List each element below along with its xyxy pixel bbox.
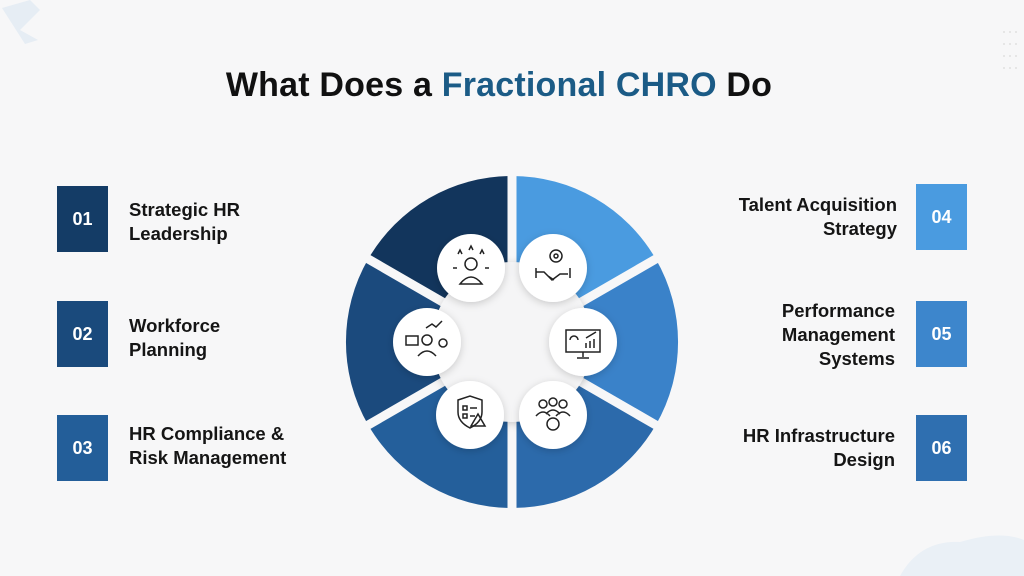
item 01 [57, 186, 240, 252]
label 04: Talent Acquisition [739, 194, 897, 215]
decoration: bottom-right blob [900, 536, 1024, 576]
decoration: dot grid [1003, 31, 1017, 69]
icon: person with briefcase and gear [393, 308, 461, 376]
number box 05: 05 [931, 324, 952, 344]
label 01: Strategic HR [129, 199, 240, 220]
label 02: Workforce [129, 315, 220, 336]
icon: team with gear [519, 381, 587, 449]
number box 06 [916, 415, 967, 481]
icon: dashboard monitor [549, 308, 617, 376]
label 03 [129, 423, 286, 468]
number box 03: 03 [72, 438, 93, 458]
number box 05 [916, 301, 967, 367]
label 02 [129, 315, 220, 360]
label 05: Performance [782, 300, 895, 321]
label 05: Management [782, 324, 895, 345]
title: What Does a Fractional CHRO Do [226, 66, 772, 104]
number box 03 [57, 415, 108, 481]
item 06 [743, 415, 967, 481]
icon: leader with stars [437, 234, 505, 302]
label 03: Risk Management [129, 447, 286, 468]
label 01 [129, 199, 240, 244]
label 06: Design [833, 449, 895, 470]
icon: handshake with target [519, 234, 587, 302]
label 03: HR Compliance & [129, 423, 284, 444]
label 04: Strategy [823, 218, 897, 239]
number box 02 [57, 301, 108, 367]
number box 04 [916, 184, 967, 250]
item 02 [57, 301, 220, 367]
number box 06: 06 [931, 438, 952, 458]
item 03 [57, 415, 286, 481]
decoration: top-left brush [2, 0, 40, 44]
label 04 [738, 194, 897, 239]
label 05: Systems [819, 348, 895, 369]
label 05 [782, 300, 895, 369]
label 01: Leadership [129, 223, 228, 244]
item 04 [738, 184, 967, 250]
icon: shield checklist warning [436, 381, 504, 449]
number box 01 [57, 186, 108, 252]
label 02: Planning [129, 339, 207, 360]
label 06: HR Infrastructure [743, 425, 895, 446]
label 06 [743, 425, 895, 470]
number box 04: 04 [931, 206, 952, 226]
item 05 [782, 300, 967, 369]
number box 02: 02 [72, 324, 93, 344]
number box 01: 01 [72, 208, 93, 228]
